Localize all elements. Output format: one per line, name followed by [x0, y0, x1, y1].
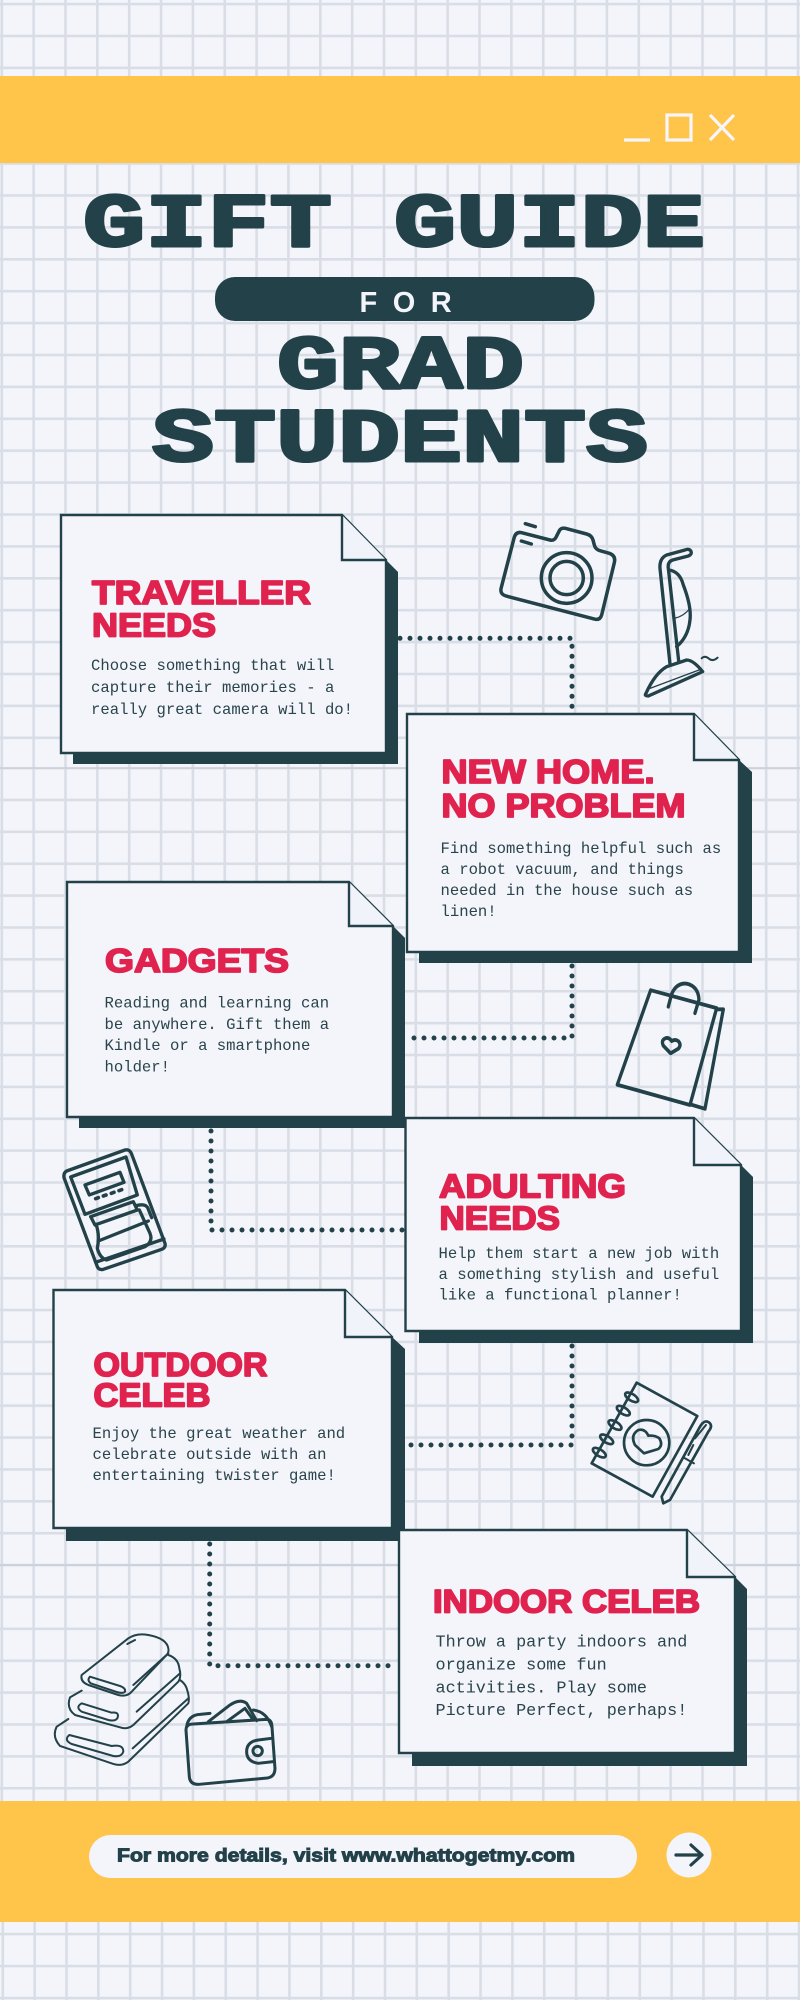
icon: vacuum cleaner [645, 549, 718, 696]
heading: INDOOR CELEB [433, 1584, 700, 1620]
body text: Choose something that will [91, 657, 334, 675]
body text [436, 1634, 687, 1721]
body text: be anywhere. Gift them a [104, 1016, 329, 1034]
body text: linen! [440, 903, 497, 921]
body text [438, 1245, 719, 1304]
body text: Reading and learning can [104, 994, 329, 1012]
body text: activities. Play some [436, 1680, 647, 1698]
title line: gift guide: GIFT GUIDE [83, 183, 705, 269]
panel: gadgets [67, 882, 405, 1128]
connector: adulting to outdoor [405, 1346, 572, 1445]
connector: gadgets to adulting [211, 1131, 405, 1230]
connector: traveller to new home [400, 638, 572, 712]
heading [442, 754, 686, 825]
bottom yellow bar [0, 1801, 800, 1922]
body text: Help them start a new job with [438, 1245, 719, 1263]
heading: CELEB [94, 1378, 210, 1414]
pill: for: FOR [360, 287, 467, 319]
icon: maximize [667, 115, 691, 140]
body text [91, 657, 353, 719]
body text: celebrate outside with an [92, 1446, 326, 1464]
body text: Find something helpful such as [440, 840, 721, 858]
heading: GADGETS [105, 943, 289, 980]
body text: Enjoy the great weather and [92, 1425, 345, 1443]
body text: really great camera will do! [91, 701, 353, 719]
body text: like a functional planner! [438, 1286, 682, 1304]
icon: close [710, 115, 734, 140]
heading: NO PROBLEM [442, 788, 686, 825]
heading [94, 1347, 268, 1414]
footer pill with link text [89, 1835, 637, 1878]
body text: a robot vacuum, and things [440, 861, 684, 879]
heading: NEEDS [440, 1200, 560, 1238]
body text: Picture Perfect, perhaps! [436, 1702, 687, 1721]
connector: new home to gadgets [405, 966, 572, 1038]
panel: indoor celeb [399, 1530, 747, 1766]
panel: outdoor celeb [54, 1290, 405, 1541]
top yellow window bar [0, 76, 800, 163]
body text: needed in the house such as [440, 882, 693, 900]
icon: planner and pen [591, 1383, 711, 1503]
panel: new home [407, 714, 752, 963]
heading: TRAVELLER [92, 575, 311, 612]
icon: shopping bag [617, 984, 723, 1109]
title line: students: STUDENTS [152, 398, 648, 484]
body text: Kindle or a smartphone [104, 1037, 310, 1055]
heading: OUTDOOR [94, 1347, 268, 1384]
heading [92, 575, 311, 644]
panel: traveller needs [61, 515, 398, 764]
body text: a something stylish and useful [438, 1266, 719, 1284]
title [83, 183, 705, 484]
heading: NEW HOME. [442, 754, 654, 791]
footer pill with link text: For more details, visit www.whattogetmy.com [117, 1844, 575, 1866]
icon: arrow button [666, 1832, 712, 1878]
heading: ADULTING [439, 1168, 626, 1206]
title line: grad: GRAD [277, 325, 524, 411]
body text [92, 1425, 345, 1485]
icon: coffee maker [64, 1150, 165, 1270]
icon: wallet [186, 1701, 275, 1784]
body text: organize some fun [436, 1656, 607, 1676]
heading [439, 1168, 626, 1238]
body text: entertaining twister game! [92, 1467, 336, 1485]
body text: Throw a party indoors and [436, 1634, 687, 1652]
pill: for [215, 277, 594, 321]
heading: NEEDS [92, 608, 216, 644]
icon: minimize [624, 138, 650, 142]
icon: towel stack [55, 1634, 189, 1765]
body text [104, 994, 329, 1076]
body text: holder! [104, 1058, 170, 1076]
body text: capture their memories - a [91, 679, 334, 697]
body text [440, 840, 721, 921]
panel: adulting needs [406, 1118, 753, 1343]
connector: outdoor to indoor [210, 1544, 398, 1666]
icon: camera [501, 524, 615, 619]
